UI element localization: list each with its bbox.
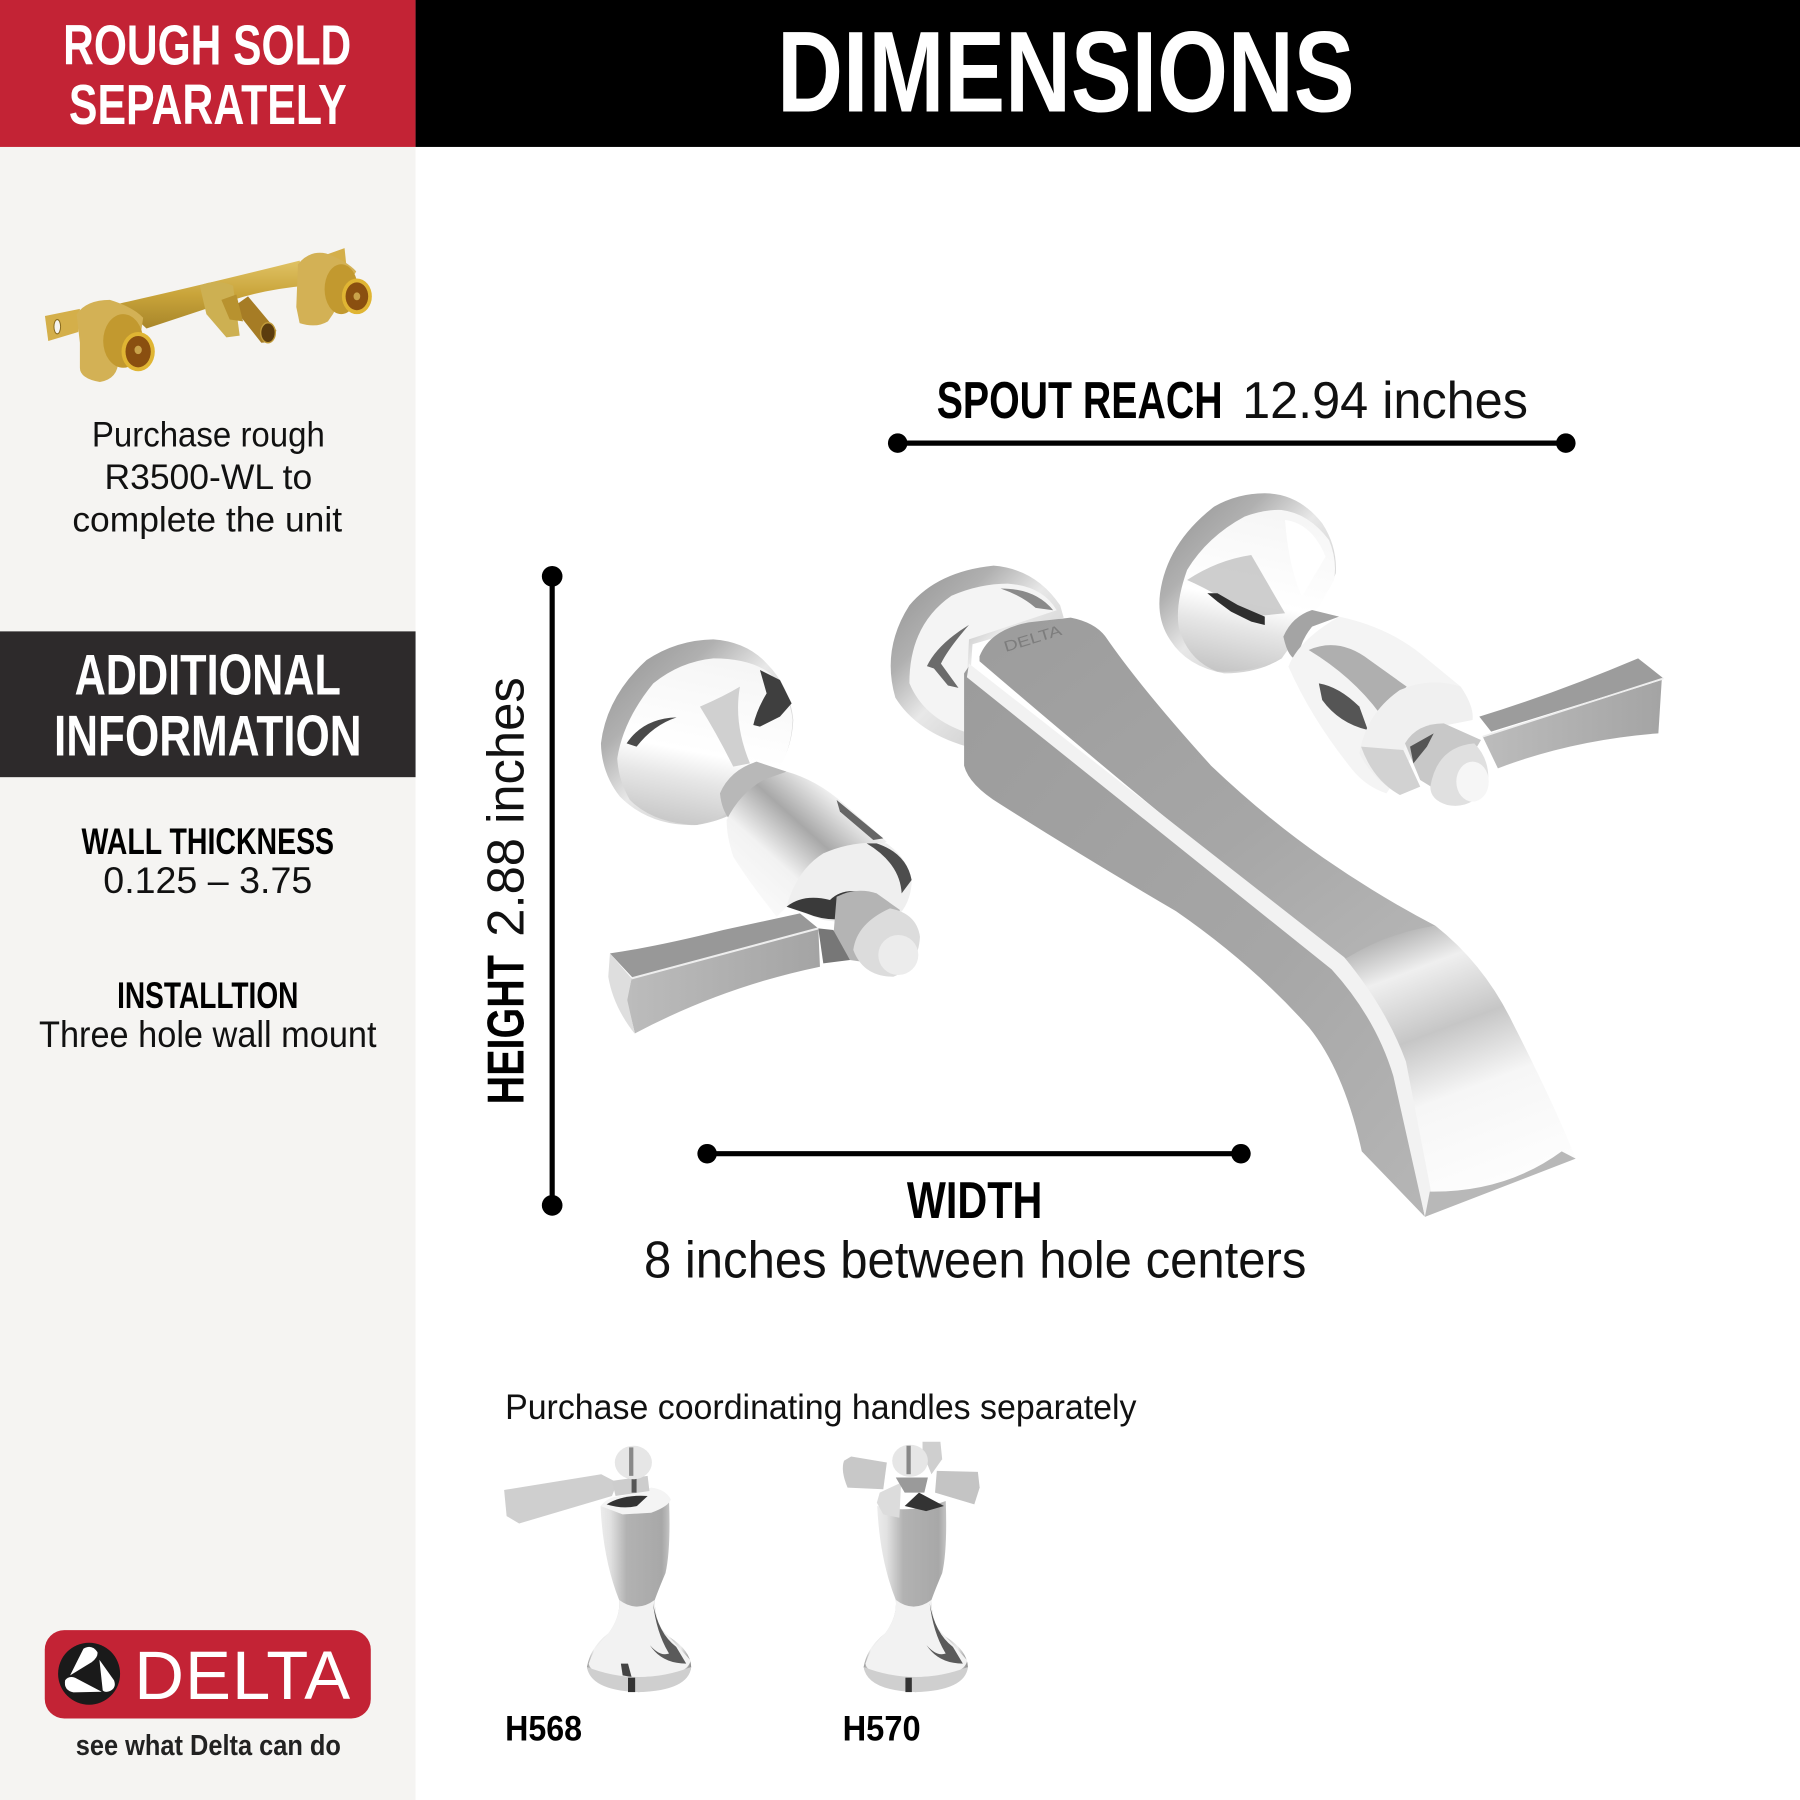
title banner: dimensions: DIMENSIONS <box>777 8 1355 136</box>
text: purchase coordinating handles: Purchase coordinating handles separately <box>505 1387 1137 1427</box>
label: height: HEIGHT <box>476 955 534 1104</box>
title banner: dimensions <box>416 0 1800 147</box>
label: height: 2.88 inches <box>476 677 534 937</box>
text: purchase rough note <box>72 415 342 540</box>
label: spout reach <box>937 371 1528 429</box>
label: width <box>644 1171 1306 1289</box>
image: right handle <box>1159 493 1663 806</box>
heading: additional information: ADDITIONAL <box>75 644 341 708</box>
label: width: 8 inches between hole centers <box>644 1231 1306 1289</box>
arrow: spout reach dimension line <box>888 433 1576 453</box>
label: spout reach: SPOUT REACH <box>937 371 1223 429</box>
arrow: height dimension line <box>542 566 562 1216</box>
logo: Delta: see what Delta can do <box>76 1730 341 1762</box>
text block: wall thickness <box>82 821 334 901</box>
text block: installation: Three hole wall mount <box>39 1014 377 1055</box>
arrow: width dimension line <box>697 1144 1251 1163</box>
text: purchase rough note: R3500-WL to <box>104 457 312 497</box>
image: spout: DELTA <box>1002 622 1064 656</box>
logo: Delta: DELTA <box>134 1637 350 1714</box>
label: H570: H570 <box>843 1708 921 1748</box>
image: spout <box>891 566 1576 1217</box>
label: height <box>476 677 534 1104</box>
text: purchase rough note: complete the unit <box>72 500 342 540</box>
image: H570 cross handle <box>843 1442 980 1692</box>
text block: wall thickness: 0.125 – 3.75 <box>103 860 312 901</box>
header banner: rough sold separately: SEPARATELY <box>69 73 347 136</box>
text: purchase rough note: Purchase rough <box>92 415 325 455</box>
image: H568 lever handle <box>504 1446 691 1692</box>
heading: additional information <box>0 631 416 777</box>
label: spout reach: 12.94 inches <box>1242 371 1528 429</box>
header banner: rough sold separately <box>0 0 416 147</box>
heading: additional information: INFORMATION <box>54 704 362 768</box>
text block: installation: INSTALLTION <box>117 975 298 1016</box>
text block: installation <box>39 975 377 1055</box>
image: brass rough valve <box>45 248 372 382</box>
image: left handle <box>601 639 920 1034</box>
label: H568: H568 <box>505 1708 582 1748</box>
background sidebar panel <box>0 147 416 1800</box>
logo: Delta <box>45 1630 371 1762</box>
label: width: WIDTH <box>907 1171 1042 1229</box>
header banner: rough sold separately: ROUGH SOLD <box>63 13 351 76</box>
text block: wall thickness: WALL THICKNESS <box>82 821 334 862</box>
